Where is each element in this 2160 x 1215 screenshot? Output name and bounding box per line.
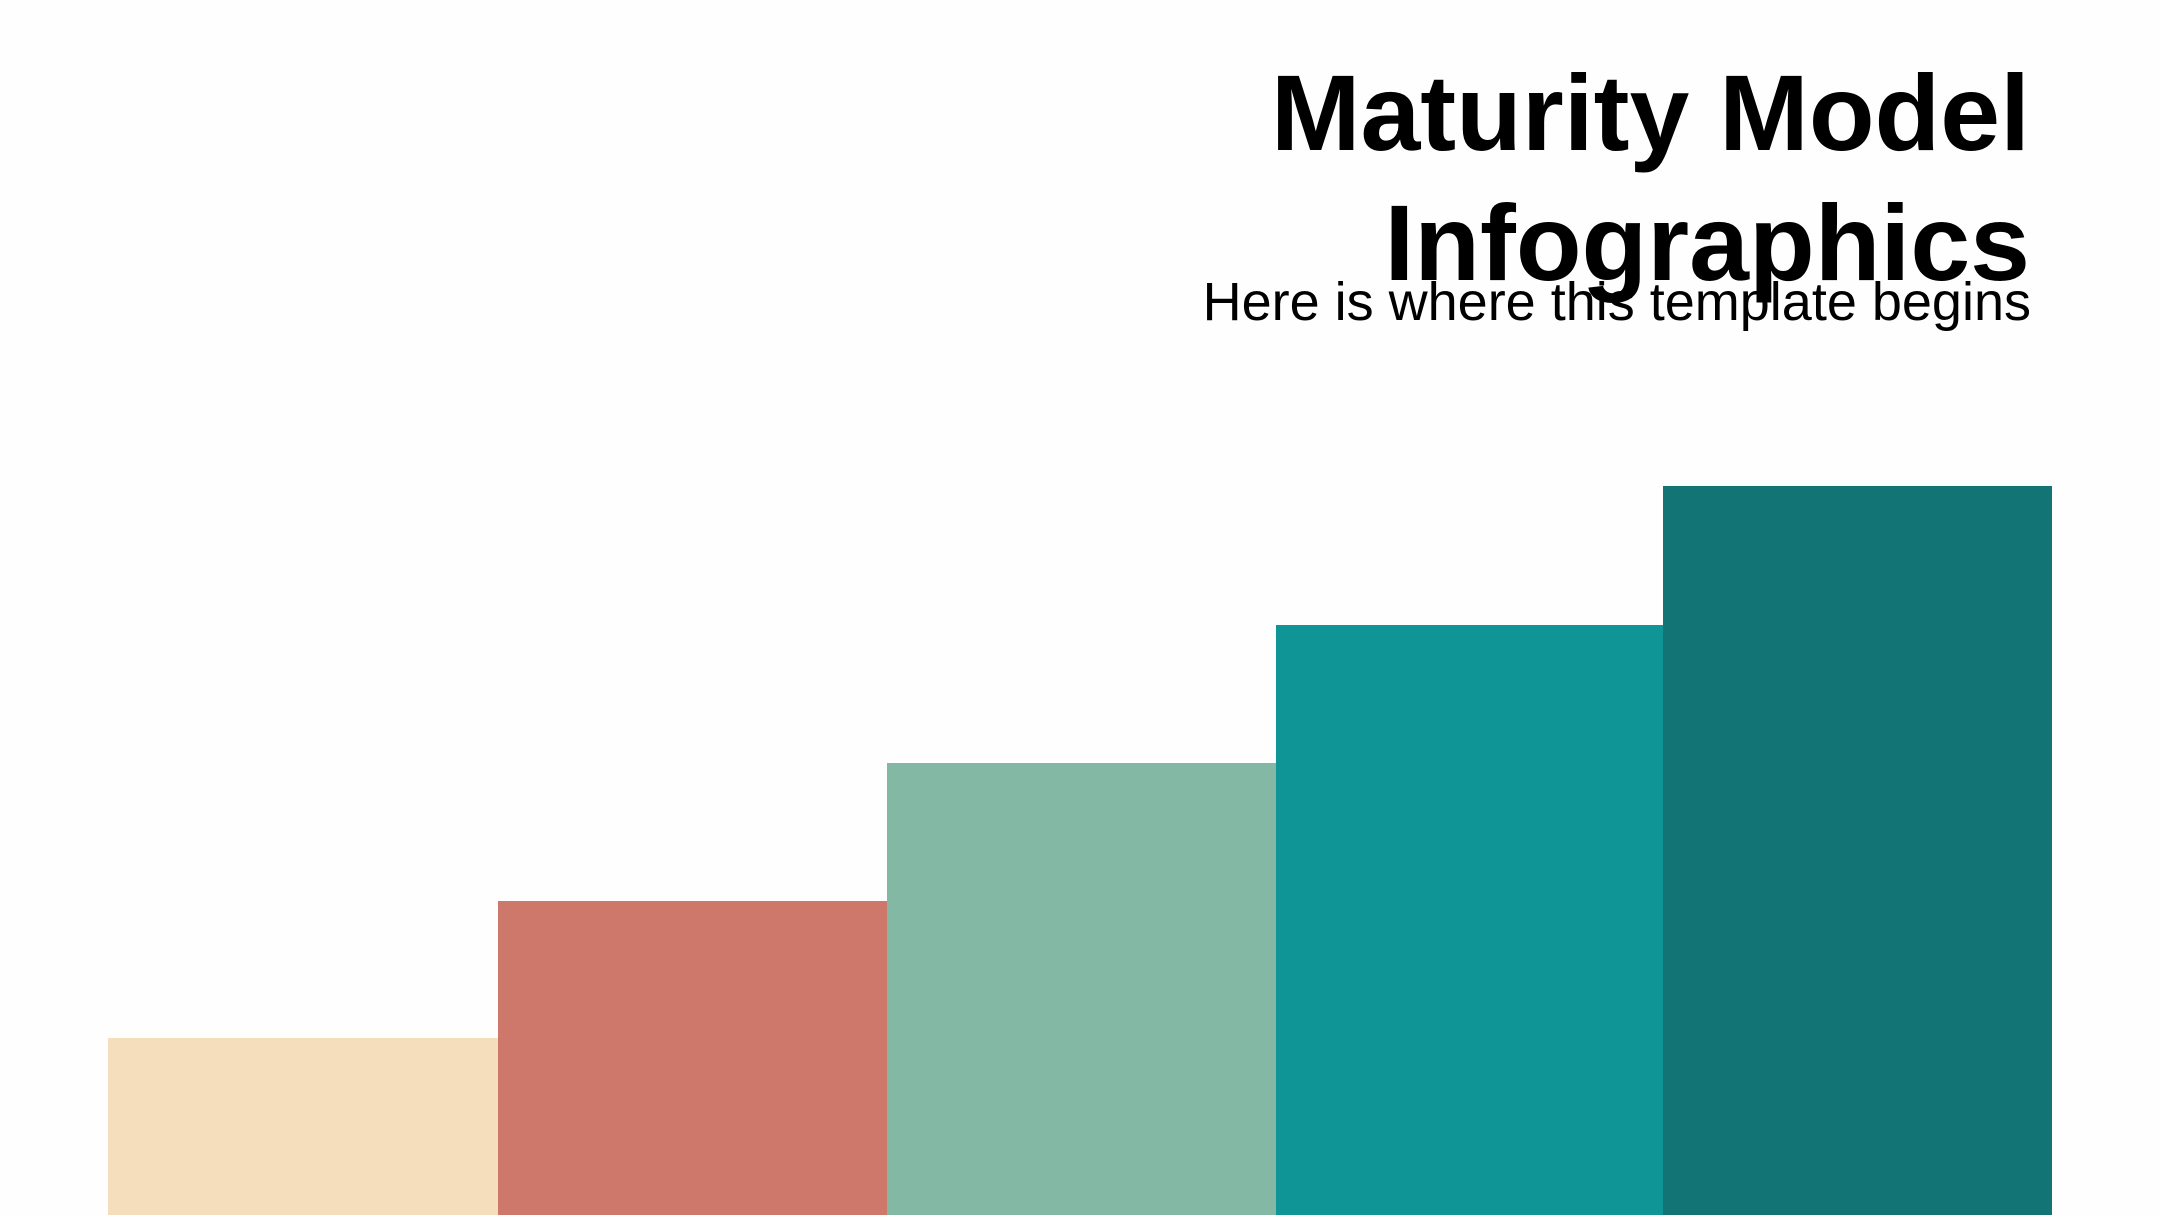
step 1: cream bar	[108, 1038, 498, 1215]
step 4: teal bar	[1276, 625, 1663, 1215]
title: Infographics	[1384, 183, 2030, 303]
subtitle: Here is where this template begins	[1203, 272, 2031, 332]
title	[1271, 53, 2030, 303]
staircase chart	[108, 486, 2052, 1215]
title: Maturity Model	[1271, 53, 2030, 173]
step 5: dark teal bar	[1663, 486, 2052, 1215]
step 2: coral bar	[498, 901, 887, 1215]
step 3: sage bar	[887, 763, 1276, 1215]
